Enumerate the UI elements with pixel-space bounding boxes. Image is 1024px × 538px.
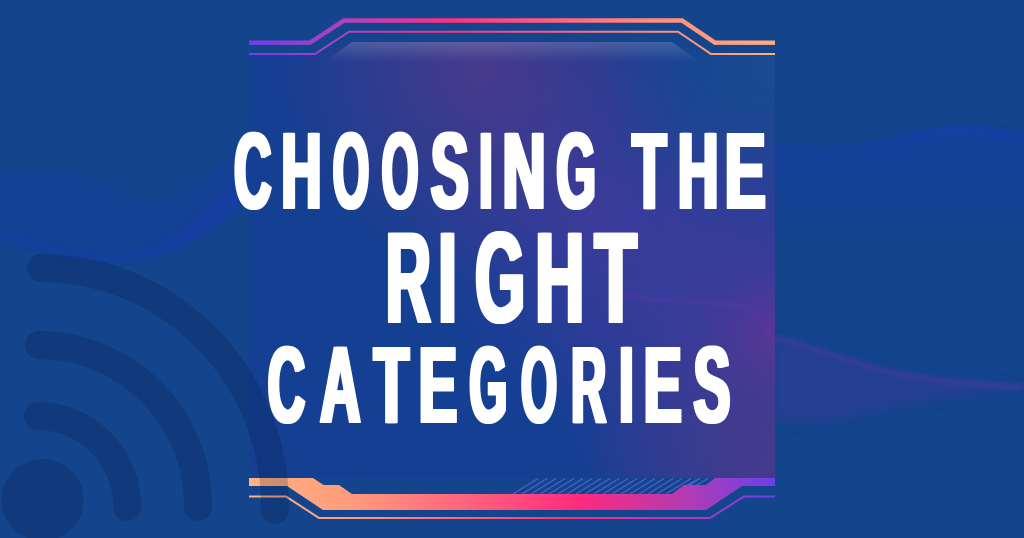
title line: choosing the: T — [632, 110, 666, 231]
title line: choosing the: C — [234, 110, 271, 231]
icon: wifi signal watermark — [2, 268, 275, 538]
title line: categories: S — [694, 324, 730, 445]
title line: choosing the: H — [281, 110, 322, 231]
title line: right: T — [595, 207, 637, 350]
title line: categories: E — [644, 324, 682, 445]
title line: categories: R — [571, 324, 606, 445]
title line: categories: A — [320, 324, 360, 445]
title line: right: G — [475, 207, 525, 350]
title line: right: I — [438, 207, 457, 350]
title line: choosing the: N — [503, 110, 546, 231]
title line: choosing the: I — [479, 110, 493, 231]
background wave: left — [0, 140, 250, 262]
title line: choosing the: H — [678, 110, 718, 231]
title line: right: R — [386, 207, 431, 350]
title line: choosing the: O — [382, 110, 418, 231]
title line: choosing the: O — [333, 110, 369, 231]
top frame — [249, 20, 775, 54]
title line: choosing the: E — [725, 110, 766, 231]
title line: choosing the: G — [556, 110, 596, 231]
background wave: right — [775, 126, 1024, 422]
bottom hatch pattern — [513, 478, 708, 494]
title line: choosing the: S — [431, 110, 468, 231]
title line: categories: I — [619, 324, 634, 445]
title — [234, 110, 765, 445]
title line: categories: T — [374, 324, 409, 445]
title line: categories: O — [521, 324, 557, 445]
title line: categories: E — [419, 324, 457, 445]
title line: categories: C — [268, 324, 305, 445]
title line: right: H — [535, 207, 584, 350]
central panel — [249, 42, 775, 478]
bottom frame — [249, 478, 775, 518]
title line: categories: G — [469, 324, 507, 445]
